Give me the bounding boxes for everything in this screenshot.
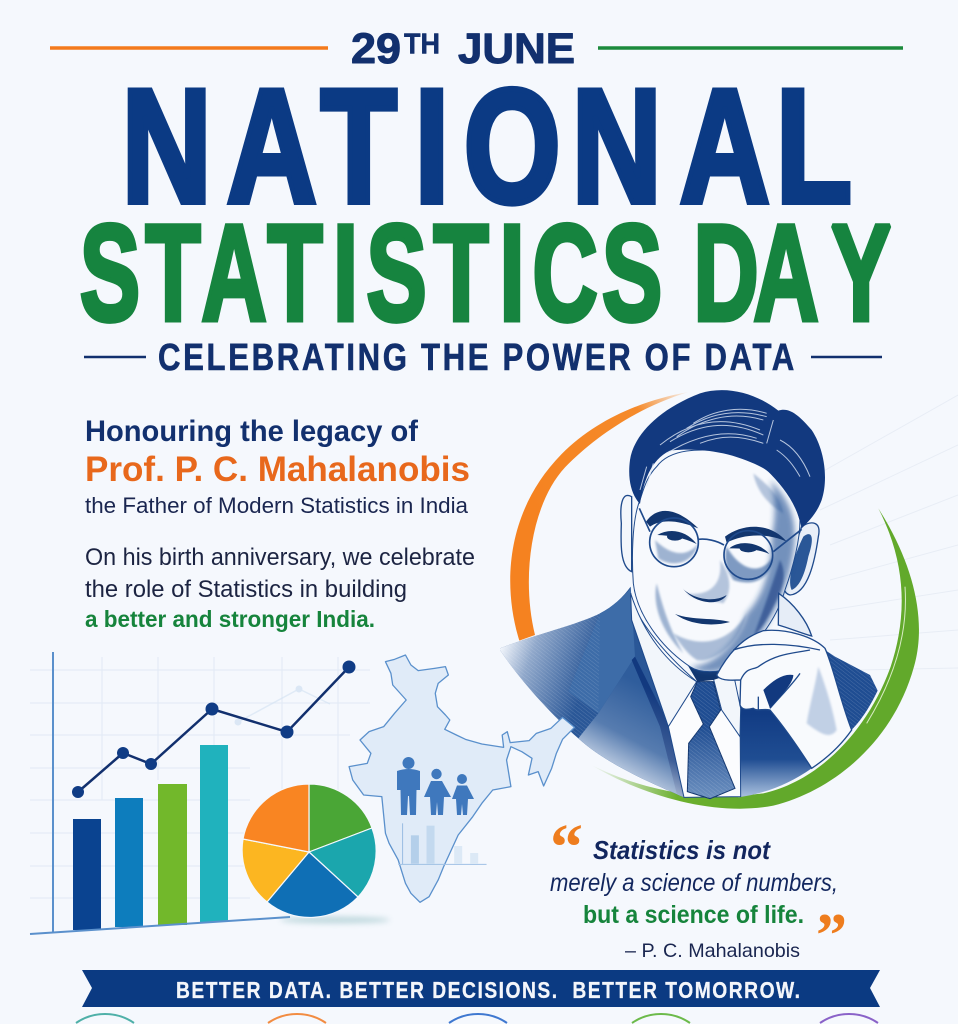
quote: merely a science of numbers, [550,869,838,897]
tie [687,682,735,799]
pie chart [242,784,376,917]
text block: tribute: the role of Statistics in building [85,576,407,603]
icon: closing quote mark: ” [816,902,847,970]
text block: tribute: the Father of Modern Statistics in India [85,493,469,518]
banner: BETTER DATA. BETTER DECISIONS. BETTER TOMORROW. [176,977,800,1003]
quote: Statistics is not [593,835,771,865]
faint trend line [234,686,330,726]
ears [621,495,632,572]
neck shadow [687,650,747,682]
date heading: 29 [351,25,401,73]
text block: tribute [85,415,475,632]
face shading [655,473,795,672]
icon: people [397,757,474,815]
date heading [50,25,903,73]
pie shadow [280,916,390,924]
text block: tribute: On his birth anniversary, we celebrate [85,544,475,571]
face [632,450,800,672]
text block: tribute: a better and stronger India. [85,606,375,632]
icon circles row [76,1014,878,1023]
quote: but a science of life. [583,901,804,929]
banner [82,970,880,1007]
chart grid [30,657,370,898]
bar chart [30,652,290,934]
icon: opening quote mark: “ [550,811,583,884]
mini bars [398,823,487,864]
portrait with tricolour ring [500,390,919,809]
suit [500,587,684,797]
title: statistics day: STATISTICS DAY [80,196,891,350]
text block: tribute: Prof. P. C. Mahalanobis [85,450,470,489]
title: national: NATIONAL [122,55,852,237]
india map [349,655,575,902]
eyebrows and eyes [646,511,787,624]
ring: orange arc [510,392,688,641]
quote [550,811,847,970]
suit right [738,650,878,797]
ring: green arc [588,508,919,809]
collar [631,593,741,737]
glasses [639,508,802,579]
line chart [72,660,356,798]
hand [717,593,852,768]
date heading: TH [404,28,440,60]
subtitle: CELEBRATING THE POWER OF DATA [158,337,794,379]
text block: tribute: Honouring the legacy of [85,415,419,448]
quote: – P. C. Mahalanobis [625,940,800,962]
date heading: JUNE [458,25,575,73]
hair [629,390,825,528]
shirt [631,593,741,797]
